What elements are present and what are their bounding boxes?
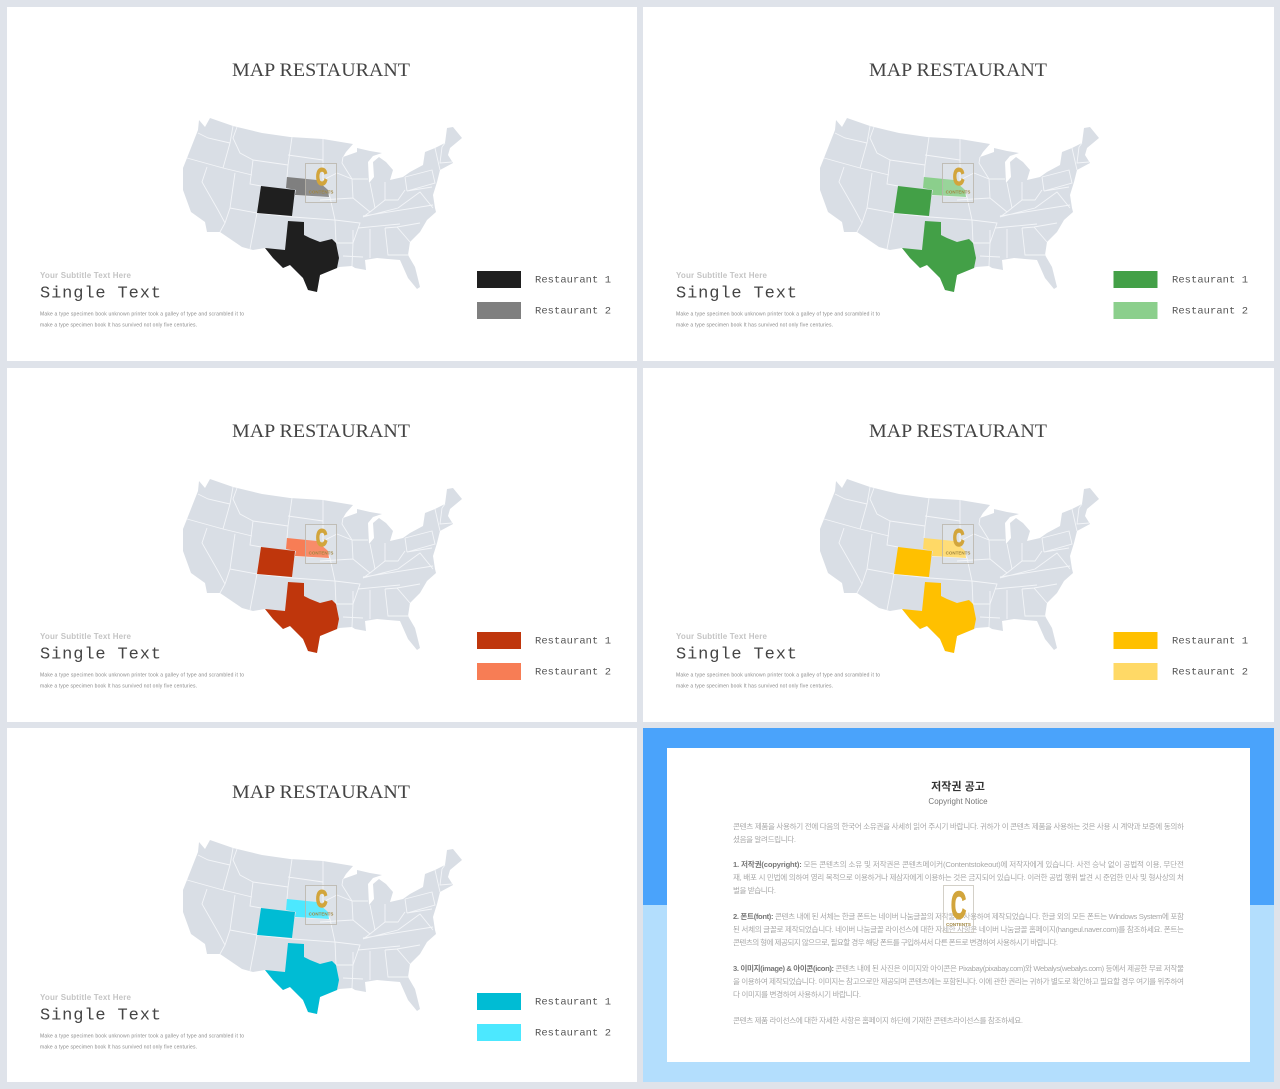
text block <box>676 271 880 328</box>
icon: watermark: C <box>316 526 328 552</box>
legend: Restaurant 1 <box>535 274 611 286</box>
legend <box>477 271 611 319</box>
legend: Restaurant 2 <box>535 1028 611 1040</box>
map: United States with highlighted states <box>183 479 462 653</box>
text block: Single Text <box>40 1006 161 1026</box>
text block: notice body: 1. 저작권(copyright): 모든 콘텐츠의 소유 및 저작권은 콘텐츠메이커(Contentstokeout)에 저작자에게 있습니다. 사전 승낙 없이 공법적 이용, 무단전 <box>733 859 1184 869</box>
text block: notice body: 을 이용하여 제작되었습니다. 이미지는 참고으로만 제공되며 콘텐츠에는 포함된니다. 이에 관한 권리는 귀하가 별도로 확인하고 필요할 경우 여기를 위주하여 <box>733 976 1184 986</box>
text block: notice body: 콘텐츠 제품 라이선스에 대한 자세한 사항은 홈페이지 하단에 기재한 콘텐츠라이선스를 참조하세요. <box>733 1015 1023 1025</box>
heading: 저작권 공고 <box>931 779 985 793</box>
text block <box>40 632 244 690</box>
heading <box>928 779 988 806</box>
text block: notice body: 셨음을 알려드립니다. <box>733 834 796 844</box>
icon: watermark: CONTENTS <box>946 550 970 556</box>
text block: make a type specimen book It has survived not only five centuries. <box>40 684 197 690</box>
text block: Make a type specimen book unknown printer took a galley of type and scrambled it to <box>40 1034 244 1040</box>
text block: make a type specimen book It has survived not only five centuries. <box>676 322 833 328</box>
legend <box>1114 271 1248 319</box>
icon: watermark: CONTENTS <box>309 912 333 916</box>
map: United States with highlighted states <box>183 118 462 292</box>
panel: black map slide <box>7 7 637 361</box>
icon: watermark <box>306 886 336 924</box>
text block: Your Subtitle Text Here <box>40 271 132 280</box>
text block: notice body: 다 이미지를 변경하여 사용하시기 바랍니다. <box>733 989 861 999</box>
text block: Your Subtitle Text Here <box>676 271 768 280</box>
title: MAP RESTAURANT <box>232 421 410 442</box>
text block: notice body: 콘텐츠의 형에 제공되지 않으므로, 필요할 경우 해당 폰트를 구입하셔서 다른 폰트로 변경하여 사용하시기 바랍니다. <box>733 937 1058 947</box>
text block: Single Text <box>40 284 161 304</box>
legend <box>477 632 611 680</box>
icon: watermark: C <box>953 165 965 191</box>
text block: make a type specimen book It has survived not only five centuries. <box>676 684 833 690</box>
title: MAP RESTAURANT <box>869 60 1047 81</box>
text block: notice body: 콘텐츠 제품을 사용하기 전에 다음의 한국어 소유권을 사세히 읽어 주시기 바랍니다. 귀하가 이 콘텐츠 제품을 사용하는 것은 사용 시 계약과 보증에 동의하 <box>733 821 1184 831</box>
legend <box>477 993 611 1041</box>
text block: Your Subtitle Text Here <box>676 632 768 641</box>
heading: Copyright Notice <box>928 797 988 806</box>
text block: make a type specimen book It has survived not only five centuries. <box>40 322 197 328</box>
icon: watermark <box>944 885 974 932</box>
icon: watermark <box>942 164 974 202</box>
text block <box>676 632 880 690</box>
text block: notice body: 된 서체의 글꼴로 제작되었습니다. 네이버 나눔글꼴 라이선스에 대한 자세한 사항은 네이버 나눔글꼴 홈페이지(hangeul.naver.com)를 참조하세요. 폰트는 <box>733 924 1184 934</box>
text block: Make a type specimen book unknown printer took a galley of type and scrambled it to <box>676 672 880 678</box>
legend: Restaurant 1 <box>535 636 611 648</box>
icon: watermark <box>306 524 336 564</box>
map: United States with highlighted states <box>820 479 1099 653</box>
map: United States with highlighted states <box>183 840 462 1014</box>
legend: Restaurant 1 <box>1172 636 1248 648</box>
text block <box>40 271 244 328</box>
icon: watermark: C <box>951 885 966 927</box>
text block <box>40 993 244 1050</box>
icon: watermark <box>306 164 336 202</box>
icon: watermark: C <box>316 887 328 913</box>
text block: make a type specimen book It has survived not only five centuries. <box>40 1044 197 1050</box>
text block: Single Text <box>676 284 797 304</box>
legend: Restaurant 1 <box>1172 274 1248 286</box>
map: United States with highlighted states <box>820 118 1099 292</box>
text block: Make a type specimen book unknown printer took a galley of type and scrambled it to <box>676 312 880 318</box>
icon: watermark <box>942 524 974 564</box>
legend <box>1114 632 1248 680</box>
text block: Make a type specimen book unknown printer took a galley of type and scrambled it to <box>40 312 244 318</box>
icon: watermark: CONTENTS <box>946 190 970 194</box>
legend: Restaurant 1 <box>535 996 611 1008</box>
text block: Your Subtitle Text Here <box>40 993 132 1002</box>
panel: cyan map slide <box>7 728 637 1082</box>
text block: Your Subtitle Text Here <box>40 632 132 641</box>
icon: watermark: C <box>316 165 328 191</box>
panel: amber map slide <box>643 368 1274 722</box>
text block: Make a type specimen book unknown printer took a galley of type and scrambled it to <box>40 672 244 678</box>
text block: Single Text <box>676 646 797 664</box>
text block: notice body: 2. 폰트(font): 콘텐츠 내에 된 서체는 한글 폰트는 네이버 나눔글꼴의 저작물을 사용하여 제작되었습니다. 한글 외의 모든 폰트는 Windows System에 포함 <box>733 911 1184 921</box>
legend: Restaurant 2 <box>1172 306 1248 318</box>
title: MAP RESTAURANT <box>232 60 410 81</box>
icon: watermark: CONTENTS <box>946 922 971 927</box>
text block: notice body: 벌을 받습니다. <box>733 885 776 895</box>
legend: Restaurant 2 <box>535 306 611 318</box>
text block: notice body: 3. 이미지(image) & 아이콘(icon): 콘텐츠 내에 된 사진은 이미지와 아이콘은 Pixabay(pixabay.com)와 Webalys(webalys.com) 등에서 제공한 무료 저작물 <box>733 963 1184 973</box>
text block: Single Text <box>40 646 161 664</box>
panel: copyright notice <box>643 728 1274 1082</box>
icon: watermark: C <box>953 526 965 552</box>
text block: notice body <box>733 821 1184 1025</box>
title: MAP RESTAURANT <box>869 421 1047 442</box>
title: MAP RESTAURANT <box>232 782 410 803</box>
icon: watermark: CONTENTS <box>309 550 333 556</box>
panel: red map slide <box>7 368 637 722</box>
text block: notice body: 재, 배포 시 민법에 의하여 영리 목적으로 이용하거나 제삼자에게 이용하는 것은 금지되어 있습니다. 이러한 공법 행위 발견 시 준엄한 민사 및 형사상의 처 <box>733 872 1184 882</box>
panel: green map slide <box>643 7 1274 361</box>
legend: Restaurant 2 <box>1172 666 1248 678</box>
legend: Restaurant 2 <box>535 666 611 678</box>
icon: watermark: CONTENTS <box>309 190 333 194</box>
